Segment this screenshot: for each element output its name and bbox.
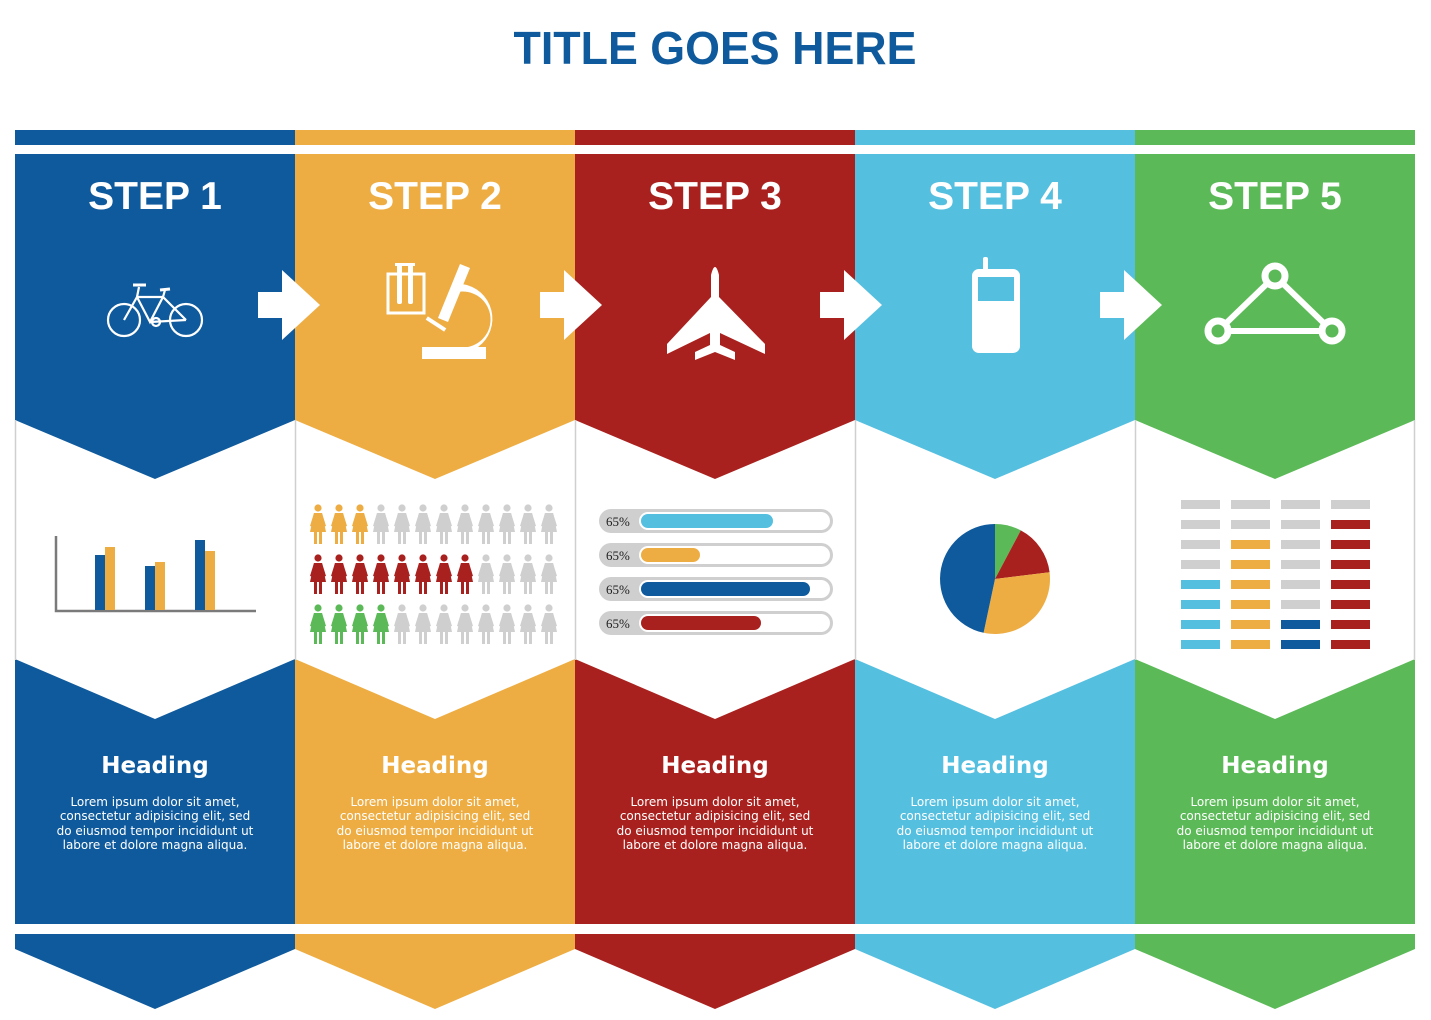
arrows (258, 270, 1162, 340)
body text blocks (57, 795, 1374, 852)
body text blocks: labore et dolore magna aliqua. (343, 838, 527, 852)
body text blocks: Lorem ipsum dolor sit amet, (350, 795, 520, 809)
headings (101, 753, 1329, 779)
progress bars: 65% (606, 548, 630, 563)
body text blocks: Lorem ipsum dolor sit amet, (70, 795, 240, 809)
icon: mobile phone (972, 257, 1020, 353)
headings: Heading (1221, 753, 1329, 779)
icon: microscope (388, 263, 492, 359)
body text blocks: do eiusmod tempor incididunt ut (617, 824, 814, 838)
column: step 5 (1135, 130, 1415, 1009)
pictogram: people (310, 504, 557, 644)
step labels: STEP 3 (648, 175, 782, 218)
body text blocks: labore et dolore magna aliqua. (623, 838, 807, 852)
column: step 2 (295, 130, 575, 1009)
progress bars: 65% (606, 582, 630, 597)
headings: Heading (661, 753, 769, 779)
step labels: STEP 1 (88, 175, 222, 218)
title: TITLE GOES HERE (514, 22, 916, 74)
body text blocks: do eiusmod tempor incididunt ut (337, 824, 534, 838)
icon: bicycle (108, 285, 202, 336)
body text blocks: labore et dolore magna aliqua. (1183, 838, 1367, 852)
body text blocks: do eiusmod tempor incididunt ut (57, 824, 254, 838)
body text blocks: labore et dolore magna aliqua. (63, 838, 247, 852)
column: step 3 (575, 130, 855, 1009)
bar chart (56, 536, 256, 611)
step labels: STEP 2 (368, 175, 502, 218)
body text blocks: Lorem ipsum dolor sit amet, (910, 795, 1080, 809)
body text blocks: Lorem ipsum dolor sit amet, (630, 795, 800, 809)
headings: Heading (101, 753, 209, 779)
column: step 1 (15, 130, 295, 1009)
step labels: STEP 4 (928, 175, 1062, 218)
progress bars: 65% (606, 616, 630, 631)
body text blocks: consectetur adipisicing elit, sed (340, 809, 530, 823)
body text blocks: labore et dolore magna aliqua. (903, 838, 1087, 852)
pie chart (940, 524, 1050, 634)
headings: Heading (941, 753, 1049, 779)
progress bars: 65% (606, 514, 630, 529)
icon: airplane (667, 267, 765, 360)
step labels: STEP 5 (1208, 175, 1342, 218)
progress bars (599, 509, 833, 635)
color grid chart (1181, 500, 1370, 649)
body text blocks: consectetur adipisicing elit, sed (60, 809, 250, 823)
step labels (88, 175, 1342, 218)
body text blocks: consectetur adipisicing elit, sed (620, 809, 810, 823)
column: step 4 (855, 130, 1135, 1009)
body text blocks: consectetur adipisicing elit, sed (1180, 809, 1370, 823)
icon: triangle network (1208, 266, 1342, 341)
body text blocks: Lorem ipsum dolor sit amet, (1190, 795, 1360, 809)
headings: Heading (381, 753, 489, 779)
body text blocks: do eiusmod tempor incididunt ut (897, 824, 1094, 838)
body text blocks: do eiusmod tempor incididunt ut (1177, 824, 1374, 838)
body text blocks: consectetur adipisicing elit, sed (900, 809, 1090, 823)
